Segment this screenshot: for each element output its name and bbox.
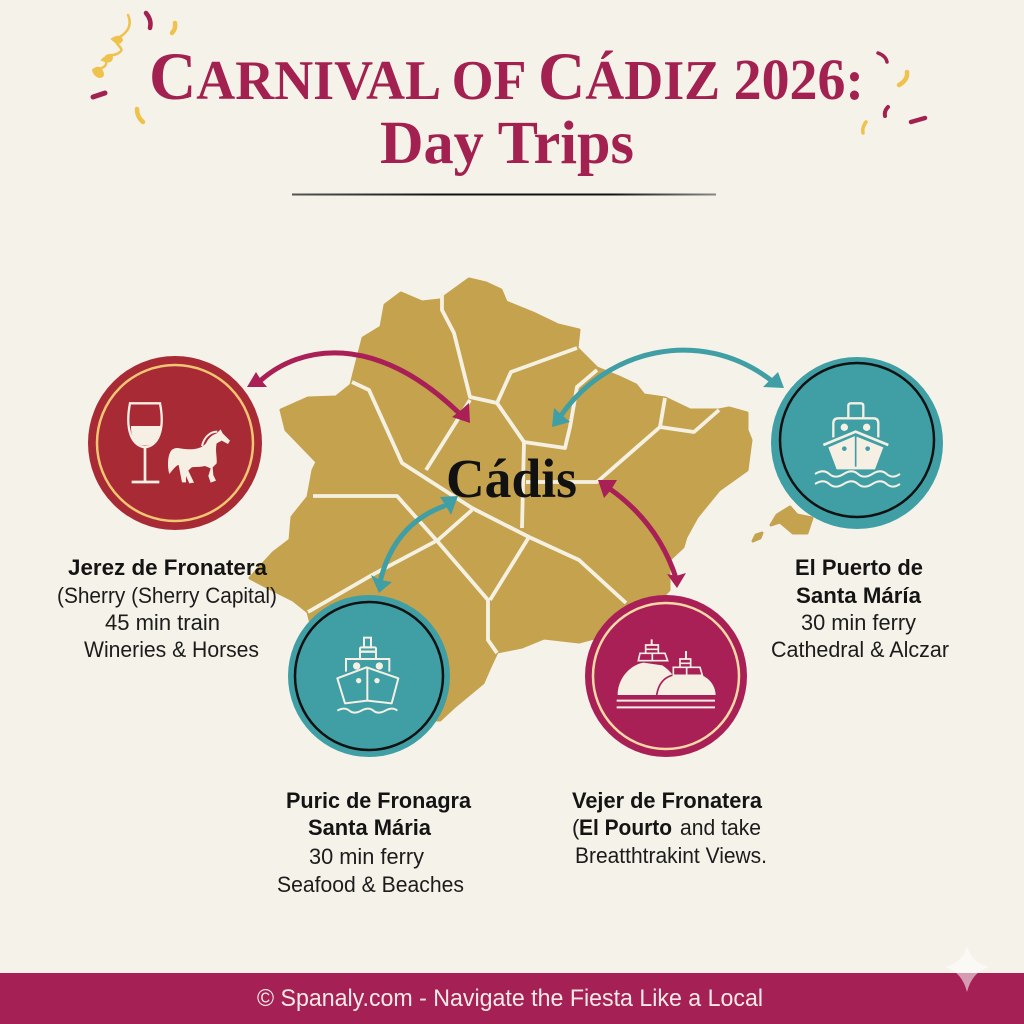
text block: El Puerto de Santa María: El Puerto de [795,555,923,580]
text block: Vejer de Fronatera: Vejer de Fronatera [572,788,763,813]
title: Day Trips [380,110,634,177]
text block: Puric de Fronagra [277,788,472,897]
arrow: Cádiz to Vejer [598,480,686,588]
text block: Vejer de Fronatera: and take [680,815,761,840]
footer bar [0,973,1024,1024]
confetti: right [863,53,925,133]
arrow: Cádiz to Santa María [371,496,458,593]
map district borders [308,293,719,653]
text block: Puric de Fronagra: Puric de Fronagra [286,788,472,813]
text block: Vejer de Fronatera: Breatthtrakint Views. [575,843,767,868]
badge: El Puerto ferry [771,357,943,529]
title divider rule [292,194,716,196]
text block: El Puerto de Santa María: 30 min ferry [801,610,916,635]
text block: El Puerto de Santa María: Cathedral & Alczar [771,637,949,662]
map label: Cádis: Cádis [446,448,577,509]
text block: El Puerto de Santa María: Santa Máría [796,583,922,608]
icon: domed cathedral [617,639,716,707]
text block: El Puerto de Santa María [771,555,949,662]
badge: Jerez wine and horse [88,356,262,530]
badge: Santa María ship [288,595,450,757]
map islands [753,507,812,541]
text block: Vejer de Fronatera: El Pourto [579,815,672,840]
title [149,38,864,177]
text block: Jerez de Fronatera: Wineries & Horses [84,637,259,662]
confetti: left [93,13,175,122]
icon: wine glass and horse [128,403,230,483]
text block: Puric de Fronagra: Seafood & Beaches [277,872,464,897]
text block: Vejer de Fronatera [572,788,767,868]
text block: Puric de Fronagra: 30 min ferry [309,844,424,869]
arrow: Cádiz to El Puerto [552,350,784,427]
badge: Vejer domes [585,595,747,757]
footer bar: © Spanaly.com - Navigate the Fiesta Like a Local [257,985,763,1012]
icon: ferry boat with waves [815,403,900,487]
text block: Puric de Fronagra: Santa Mária [308,815,432,840]
icon: sparkle star [945,945,989,992]
icon: ship [337,638,398,713]
text block: Jerez de Fronatera: (Sherry (Sherry Capital) [57,583,277,608]
text block: Jerez de Fronatera: 45 min train [105,610,220,635]
text block: Jerez de Fronatera [57,555,277,662]
map of Cádiz province [250,279,812,720]
text block: Jerez de Fronatera: Jerez de Fronatera [68,555,268,580]
arrow: Jerez to Cádiz [247,353,470,423]
title: CARNIVAL OF CÁDIZ 2026: [149,38,864,114]
text block: Vejer de Fronatera: ( [572,815,580,840]
